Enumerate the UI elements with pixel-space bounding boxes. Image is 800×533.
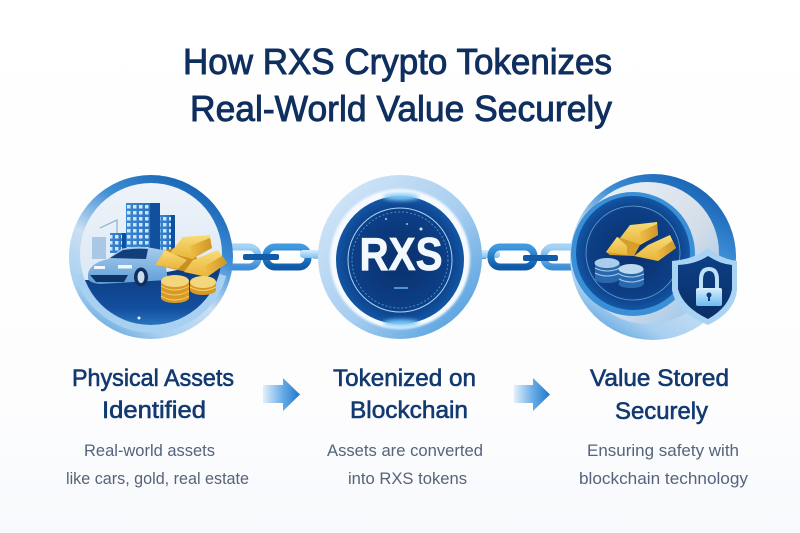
icon: gold bars [155,235,227,277]
heading: value stored: Securely [615,398,708,425]
arrow: step 1 to step 2 [263,378,300,411]
icon: coins [594,258,644,288]
icon: buildings [92,203,175,259]
title: Real-World Value Securely [190,88,612,129]
circle: RXS token [318,175,482,339]
step 1 text [66,365,249,488]
description: step 3: Ensuring safety with [587,442,739,460]
circle: physical assets [69,175,233,339]
heading: physical assets: Identified [102,397,206,424]
ground [85,268,221,325]
label: RXS: RXS [360,228,442,280]
description: step 2 [327,442,483,488]
icon: coins [161,275,216,303]
arrow: step 2 to step 3 [514,378,550,411]
chain end [576,250,588,258]
description: step 2: Assets are converted [327,442,483,460]
heading: physical assets: Physical Assets [72,365,234,392]
icon: shield with lock [672,248,737,325]
description: step 3 [579,442,749,488]
icon: car [88,247,168,286]
heading: physical assets [72,365,234,424]
chain: left connector [217,247,344,267]
icon: crane [100,220,117,238]
title [183,41,612,129]
title: How RXS Crypto Tokenizes [183,41,612,82]
chain: right connector [456,247,586,267]
heading: value stored: Value Stored [590,365,729,392]
heading: tokenized [333,365,476,424]
description: step 3: blockchain technology [579,470,749,488]
description: step 1: Real-world assets [84,442,215,460]
description: step 1: like cars, gold, real estate [66,470,249,488]
circle: secure vault [570,174,737,340]
description: step 2: into RXS tokens [348,470,467,488]
heading: tokenized: Tokenized on [333,365,476,392]
icon: gold bars [606,222,676,261]
step 2 text [327,365,483,488]
heading: tokenized: Blockchain [350,397,468,424]
heading: value stored [590,365,729,425]
description: step 1 [66,442,249,488]
step 3 text [579,365,749,488]
